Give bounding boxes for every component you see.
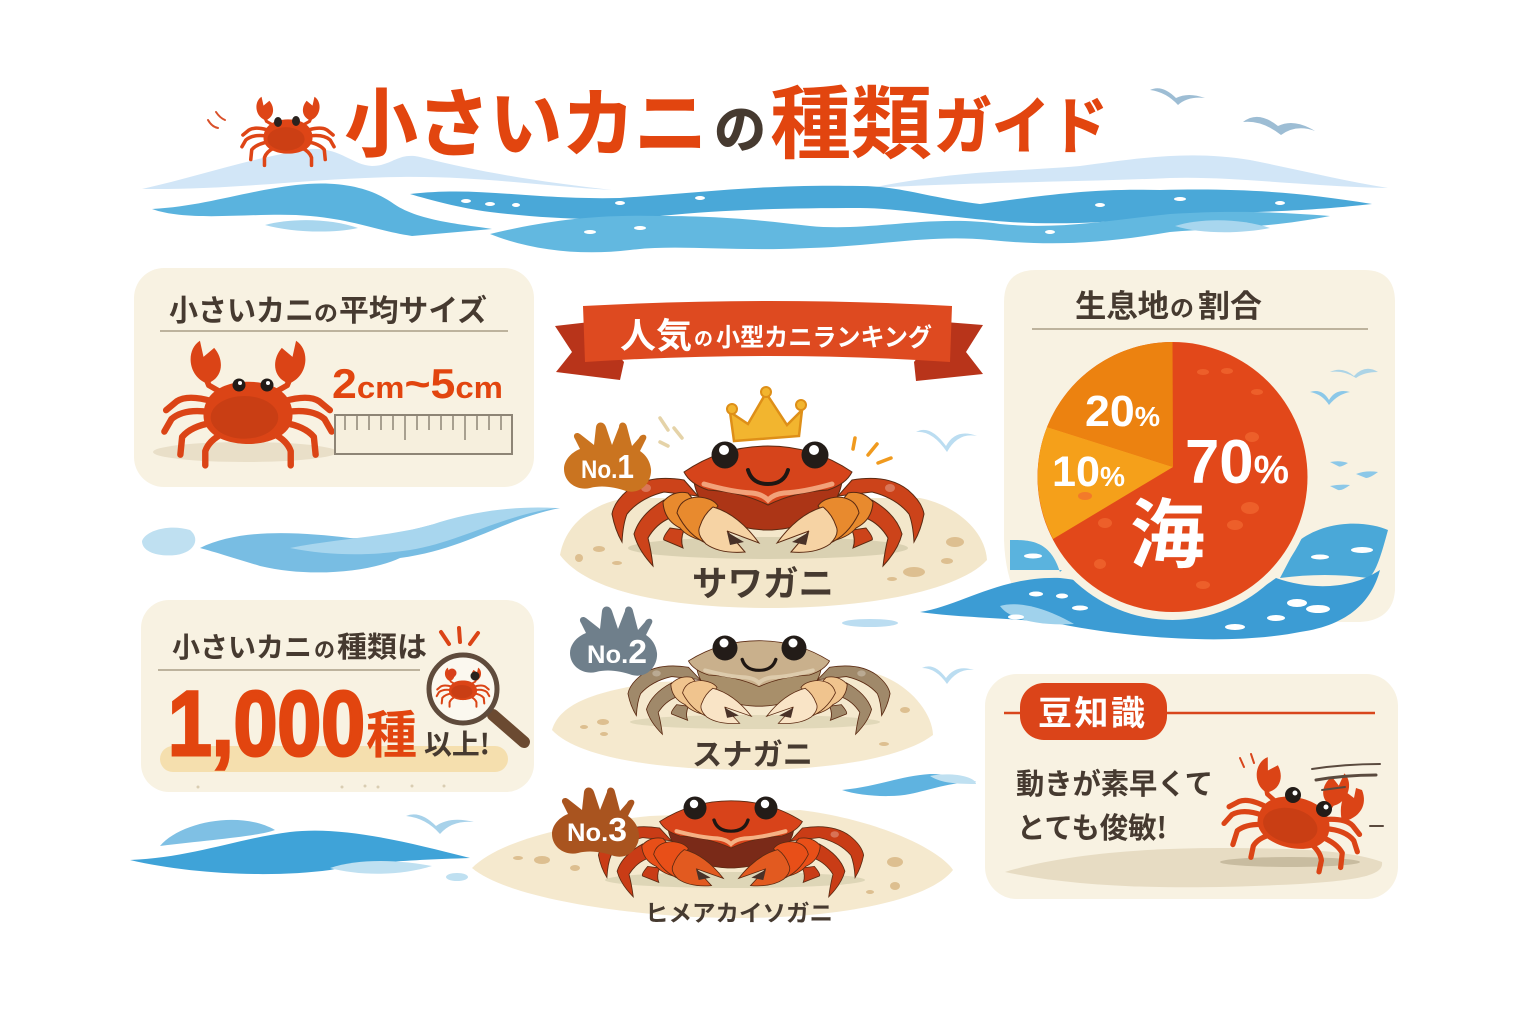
sand strip [1005, 848, 1382, 887]
icon: crab no.2 [628, 636, 890, 734]
sand under crab [153, 442, 337, 462]
icon: running crab [1218, 751, 1373, 879]
heading: species count: の [314, 634, 335, 664]
title: 種類 [770, 60, 932, 176]
heading: habitat: 割合 [1198, 281, 1262, 326]
heading: average size: 小さいカニ [169, 286, 314, 330]
wave: mid left [142, 508, 560, 572]
wave: center right [842, 774, 976, 796]
panel: average size [134, 268, 534, 487]
heading: habitat: 生息地 [1075, 281, 1169, 326]
rank 3: himeakaisogani [472, 788, 953, 928]
count value: 1,000 [168, 673, 365, 775]
count value: 種 [366, 694, 417, 768]
ribbon heading [555, 301, 983, 381]
sand [560, 498, 987, 608]
pie label: 10%: 10% [1052, 448, 1125, 496]
count value: 以上! [424, 723, 490, 763]
icons: birds center [842, 430, 977, 684]
heading: species count [172, 624, 427, 666]
icon: crab no.3 [598, 796, 864, 897]
trivia text: とても俊敏! [1017, 805, 1167, 847]
panel: species count [141, 600, 534, 792]
sand [552, 672, 933, 770]
heading: species count: 小さいカニ [172, 626, 312, 666]
icons: birds and sparkles [1310, 369, 1378, 490]
icon: crab with ruler [164, 341, 332, 465]
heading: average size: の [314, 296, 338, 328]
trivia label: 豆知識 [1038, 686, 1145, 735]
label: サワガニ [692, 556, 834, 607]
ribbon heading: の [694, 324, 713, 351]
heading: species count: 種類は [337, 624, 427, 666]
trivia text: 動きが素早くて [1016, 761, 1213, 803]
size value: 2cm~5cm [332, 360, 503, 407]
rank 2: sunagani [552, 606, 933, 774]
pie label: 20%: 20% [1085, 387, 1160, 436]
badge: no.1 [564, 422, 651, 492]
badge: no.3 [552, 788, 639, 857]
trivia label [1020, 683, 1167, 740]
title [345, 60, 1108, 176]
rank 1: sawagani [560, 387, 987, 608]
ribbon heading: 人気 [620, 308, 692, 359]
panel: habitat ratio [920, 270, 1395, 639]
trivia text [1016, 761, 1213, 847]
badge: no.1: No.1 [581, 448, 634, 485]
icon: sparkle marks [660, 418, 891, 463]
icon: magnifier [429, 628, 524, 742]
heading: average size [169, 286, 487, 330]
icon: bird lower left [406, 814, 474, 834]
panel: trivia [985, 674, 1398, 899]
ground specks [196, 784, 446, 788]
label: スナガニ [692, 730, 813, 774]
pie label: 70%: 70% [1185, 428, 1289, 497]
title: ガイド [934, 76, 1108, 166]
sand band [160, 746, 508, 772]
pie chart [1030, 334, 1316, 620]
header waves [142, 149, 1388, 252]
icon: crab no.1 [612, 442, 924, 566]
title: の [714, 88, 766, 163]
badge: no.2 [570, 606, 657, 676]
badge: no.2: No.2 [587, 633, 647, 670]
icon: crown [727, 387, 806, 441]
pie label: sea: 海 [1130, 474, 1205, 583]
title: 小さいカニ [345, 65, 707, 172]
sand [472, 810, 953, 918]
icon: title motion marks [208, 112, 225, 128]
ribbon heading: 小型カニランキング [716, 318, 932, 354]
badge: no.3: No.3 [567, 811, 627, 848]
icon: birds top right [1150, 88, 1315, 135]
waves behind pie [920, 524, 1388, 639]
icon: title crab [242, 97, 334, 165]
label: ヒメアカイソガニ [645, 894, 833, 928]
heading: average size: 平均サイズ [339, 286, 487, 330]
icon: speed lines [1240, 754, 1383, 826]
wave: lower left [130, 820, 470, 881]
ruler [335, 415, 512, 454]
heading: habitat [1075, 281, 1262, 326]
heading: habitat: の [1170, 289, 1194, 323]
